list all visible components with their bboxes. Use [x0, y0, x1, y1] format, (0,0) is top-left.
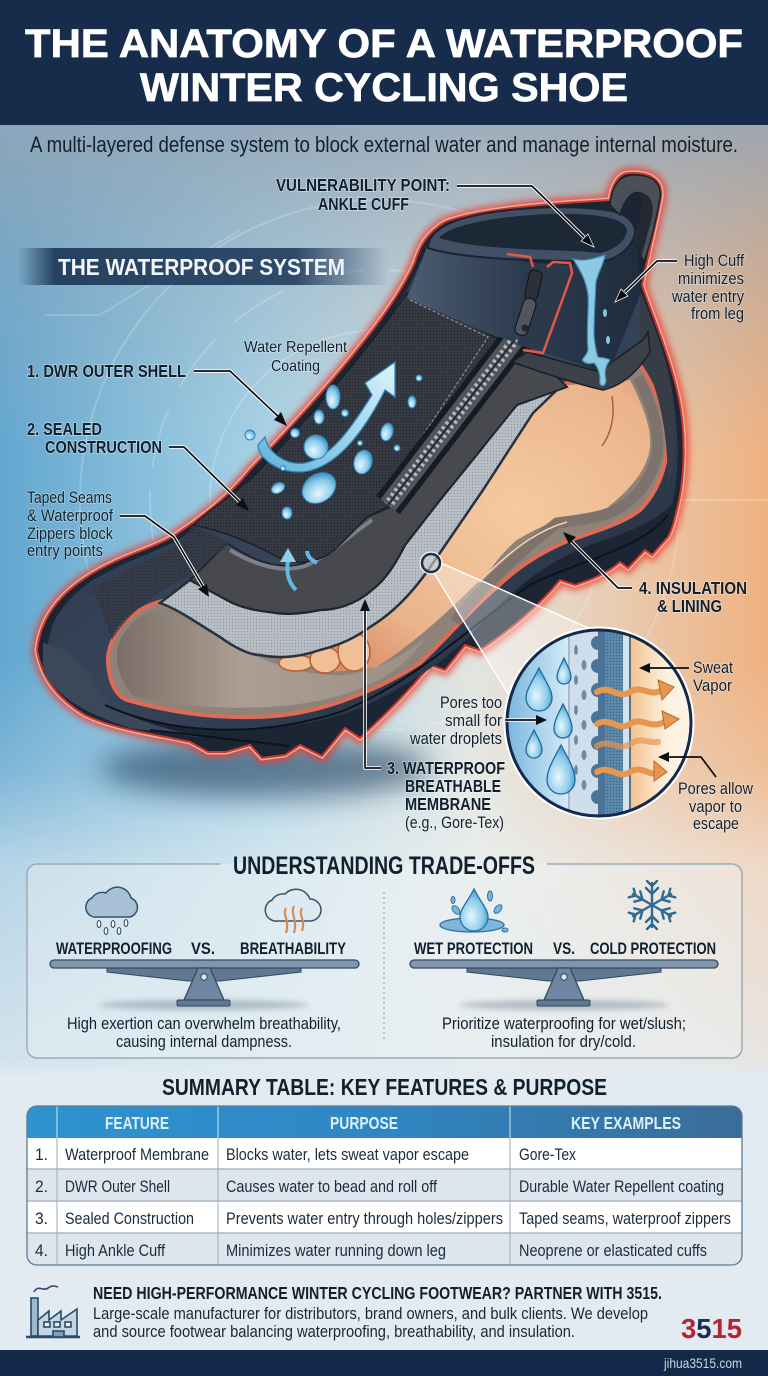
comparison labels left: [56, 939, 347, 958]
zipper: [388, 338, 516, 505]
table header: [105, 1113, 681, 1133]
label: high cuff: water entry: [671, 287, 744, 306]
summary table heading: SUMMARY TABLE: KEY FEATURES & PURPOSE: [162, 1074, 607, 1100]
icon: factory: [26, 1286, 80, 1337]
label: pores too small: [409, 693, 547, 748]
icon: snowflake: [628, 881, 676, 929]
panel heading: UNDERSTANDING TRADE-OFFS: [233, 852, 535, 880]
note left: causing internal dampness.: [116, 1032, 292, 1051]
label: sweat vapor: [639, 658, 733, 695]
table row 1: Gore-Tex: [519, 1145, 576, 1164]
footer: [0, 1350, 768, 1376]
note right: Prioritize waterproofing for wet/slush;: [442, 1014, 686, 1033]
label: waterproof breathable membrane: (e.g., Gore-Tex): [405, 813, 504, 832]
label: insulation and lining: [563, 532, 747, 616]
cuff slot highlight: [507, 254, 572, 353]
table row 1: 1.: [35, 1145, 48, 1164]
seesaw left: [50, 960, 359, 1010]
label: sweat vapor: Sweat: [693, 658, 733, 677]
label: high cuff: [615, 251, 744, 323]
shoe illustration: [37, 173, 684, 798]
label: sealed construction: [27, 419, 249, 511]
label: sealed construction: CONSTRUCTION: [45, 437, 162, 457]
foot and inner opening: [108, 365, 667, 717]
note right: insulation for dry/cold.: [491, 1032, 636, 1051]
label: DWR outer shell: 1. DWR OUTER SHELL: [27, 361, 186, 381]
dark lower panel: [190, 345, 567, 614]
label: vulnerability point: [276, 175, 594, 247]
comparison labels right: WET PROTECTION: [414, 939, 533, 958]
table row 4: 4.: [35, 1241, 48, 1260]
small seam arrows: [287, 551, 317, 590]
table row 3: Prevents water entry through holes/zippers: [226, 1209, 503, 1228]
title band: [0, 0, 768, 125]
label: sweat vapor: Vapor: [693, 676, 732, 695]
table row 3: 3.: [35, 1209, 48, 1228]
label: vulnerability point: VULNERABILITY POINT:: [276, 175, 450, 195]
section banner: the waterproof system: THE WATERPROOF SYSTEM: [58, 254, 345, 280]
insulation heel band: [455, 377, 658, 622]
title band: THE ANATOMY OF A WATERPROOF: [25, 22, 743, 66]
label: water repellent coating: Coating: [271, 358, 320, 375]
foot: [300, 380, 650, 672]
comparison labels left: VS.: [191, 939, 215, 958]
comparison labels right: VS.: [553, 939, 575, 958]
label: high cuff: minimizes: [678, 269, 744, 288]
toes: [279, 633, 370, 673]
label: pores allow vapor: [658, 752, 754, 833]
summary table: [27, 1106, 742, 1265]
table row 3: Sealed Construction: [65, 1209, 194, 1228]
fur lining toe: [117, 610, 425, 708]
table row 4: [35, 1241, 707, 1260]
table header: PURPOSE: [330, 1113, 398, 1133]
comparison labels left: WATERPROOFING: [56, 939, 172, 958]
water arrow: [258, 362, 395, 472]
note right: [442, 1014, 686, 1051]
label: insulation and lining: 4. INSULATION: [639, 578, 747, 598]
label: pores too small: Pores too: [440, 693, 502, 712]
seesaw right: [410, 960, 718, 1010]
inset droplets: [526, 658, 575, 794]
comparison labels right: COLD PROTECTION: [590, 939, 716, 958]
table header: KEY EXAMPLES: [571, 1113, 681, 1133]
note left: High exertion can overwhelm breathability,: [67, 1014, 341, 1033]
icon: steam cloud: [265, 889, 321, 933]
textured fabric upper: [193, 293, 510, 562]
water drops: [245, 375, 422, 519]
title band: WINTER CYCLING SHOE: [140, 66, 628, 110]
label: water repellent coating: Water Repellent: [244, 339, 348, 356]
label: waterproof breathable membrane: BREATHABLE: [405, 776, 501, 796]
toe fabric: [92, 525, 230, 640]
label: pores allow vapor: escape: [693, 814, 739, 833]
icon: rain cloud: [86, 887, 137, 934]
inset vapor arrows: [597, 689, 664, 774]
table row 1: Blocks water, lets sweat vapor escape: [226, 1145, 469, 1164]
table row 4: High Ankle Cuff: [65, 1241, 165, 1260]
section banner: the waterproof system: [18, 248, 388, 285]
panel: understanding trade-offs: [27, 852, 742, 1058]
label: vulnerability point: ANKLE CUFF: [318, 194, 409, 214]
note left: [67, 1014, 341, 1051]
comparison labels left: BREATHABILITY: [240, 939, 347, 958]
table row 1: [35, 1145, 576, 1164]
label: high cuff: from leg: [691, 304, 744, 323]
magnifier beam: [420, 552, 593, 697]
pull tab: [610, 175, 660, 262]
label: taped seams: Zippers block: [27, 524, 113, 543]
label: taped seams: & Waterproof: [27, 506, 113, 525]
label: pores too small: small for: [445, 711, 502, 730]
call to action text: and source footwear balancing waterproofing, breathability, and insulation.: [93, 1322, 575, 1341]
label: sealed construction: 2. SEALED: [27, 419, 102, 439]
footer: jihua3515.com: [663, 1355, 742, 1371]
label: insulation and lining: & LINING: [657, 596, 722, 616]
table row 2: 2.: [35, 1177, 48, 1196]
table row 4: Minimizes water running down leg: [226, 1241, 446, 1260]
table row 2: DWR Outer Shell: [65, 1177, 170, 1196]
label: pores allow vapor: Pores allow: [678, 779, 754, 798]
table row 1: Waterproof Membrane: [65, 1145, 209, 1164]
zipper slider: [513, 269, 543, 337]
label: DWR outer shell: [27, 361, 287, 426]
label: waterproof breathable membrane: [360, 599, 505, 832]
label: waterproof breathable membrane: MEMBRANE: [405, 794, 491, 814]
table row 2: [35, 1177, 724, 1196]
table row 2: Causes water to bead and roll off: [226, 1177, 437, 1196]
label: taped seams: Taped Seams: [27, 488, 112, 507]
cuff base strap: [512, 332, 650, 390]
label: pores allow vapor: vapor to: [689, 797, 742, 816]
toe bumper: [43, 643, 205, 738]
table row 3: Taped seams, waterproof zippers: [519, 1209, 731, 1228]
label: high cuff: High Cuff: [684, 251, 744, 270]
upper body and toe: [48, 262, 678, 730]
membrane band: [160, 387, 560, 657]
heel counter: [640, 290, 675, 490]
table row 2: Durable Water Repellent coating: [519, 1177, 724, 1196]
label: waterproof breathable membrane: 3. WATERPROOF: [387, 758, 505, 778]
ankle cuff: [407, 207, 650, 390]
comparison labels right: [414, 939, 716, 958]
inset: membrane cross-section: [504, 626, 694, 820]
table row 3: [35, 1209, 731, 1228]
water trickle: [573, 255, 610, 386]
sole lines: [105, 515, 668, 746]
label: taped seams: entry points: [27, 541, 103, 560]
icon: water drop: [440, 889, 508, 932]
call to action text: [93, 1283, 662, 1341]
table header: FEATURE: [105, 1113, 169, 1133]
call to action text: Large-scale manufacturer for distributors, brand owners, and bulk clients. We develop: [93, 1304, 648, 1323]
logo: 3515: 3515: [681, 1313, 742, 1344]
label: taped seams: [27, 488, 209, 597]
table row 4: Neoprene or elasticated cuffs: [519, 1241, 707, 1260]
label: water repellent coating: [244, 339, 348, 375]
label: pores too small: water droplets: [409, 729, 502, 748]
